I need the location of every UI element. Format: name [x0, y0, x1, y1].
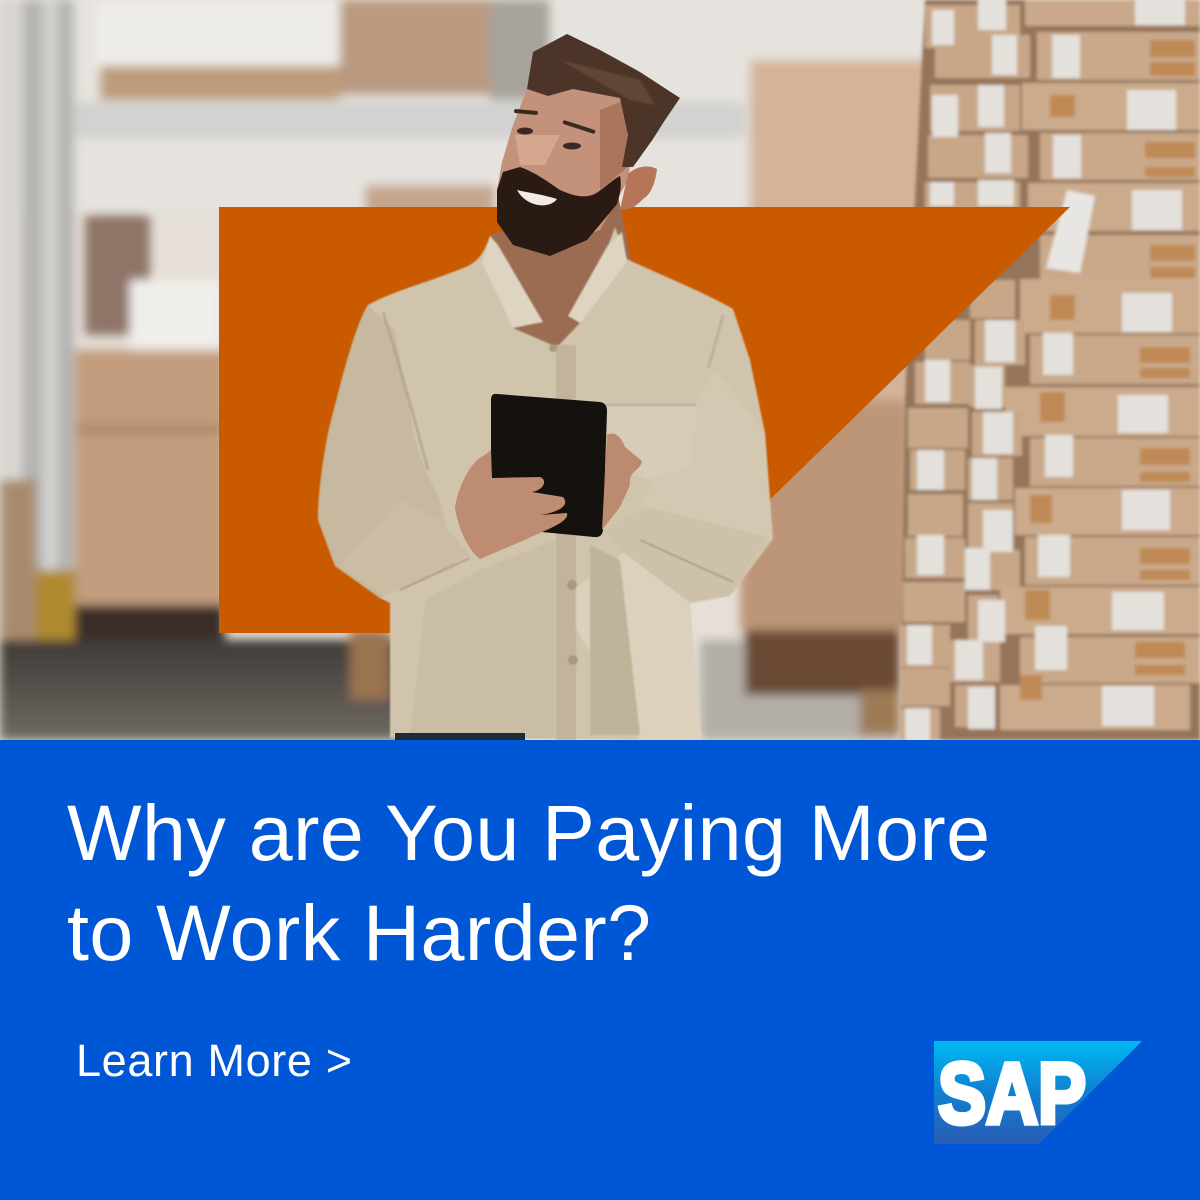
shirt shading left sleeve	[318, 305, 455, 598]
stacked cartons on the right	[900, 0, 1200, 740]
placket	[556, 345, 576, 740]
warehouse background photo	[0, 0, 1200, 740]
carton labels	[905, 0, 1185, 740]
neck	[490, 195, 632, 360]
learn more link: Learn More >	[76, 1035, 352, 1086]
teeth	[517, 190, 557, 205]
shirt	[318, 227, 773, 740]
tablet	[491, 394, 607, 537]
blue bottom panel	[0, 740, 1200, 1200]
person with tablet	[318, 34, 773, 740]
title: Why are You Paying More	[67, 788, 990, 877]
shirt buttons	[549, 344, 578, 665]
ear	[620, 166, 657, 210]
left hand	[455, 450, 567, 559]
chest pocket	[607, 405, 696, 480]
SAP logo: SAP	[938, 1046, 1086, 1142]
hair	[527, 34, 680, 167]
carton orange print marks	[1020, 40, 1195, 700]
orange angular shape	[219, 207, 1070, 633]
loose white slip	[1046, 190, 1095, 273]
beard	[497, 167, 621, 256]
shoulder seams	[383, 312, 428, 470]
eyes and brows	[514, 109, 596, 150]
title: to Work Harder?	[67, 888, 651, 977]
right sleeve highlight	[604, 505, 770, 603]
collar	[482, 236, 543, 328]
right hand	[602, 433, 642, 530]
trousers	[395, 733, 525, 740]
title	[67, 788, 990, 977]
face	[497, 80, 632, 250]
shirt shading centre	[560, 540, 702, 740]
